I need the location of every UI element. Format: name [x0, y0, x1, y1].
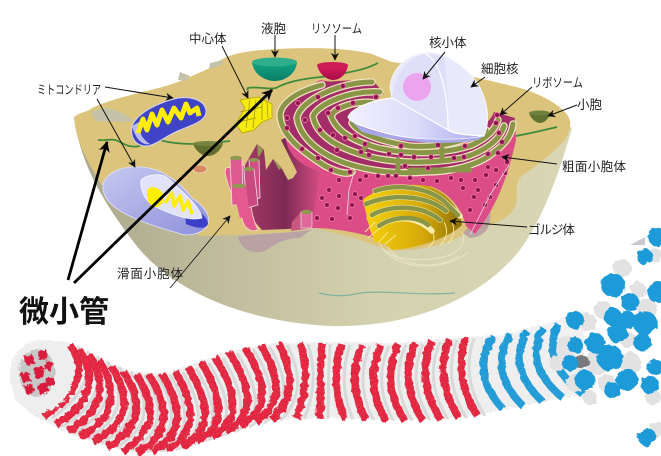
nucleolus: [403, 73, 431, 101]
vesicle right: [529, 110, 550, 123]
label: rough ER: 粗面小胞体: [562, 160, 626, 174]
callout arrows: [97, 35, 577, 288]
faint lower structures: [380, 232, 468, 266]
thick arrows to microtubules: [68, 90, 272, 283]
label: vacuole: 液胞: [261, 22, 287, 36]
centrosome: [236, 97, 272, 133]
arrow: nucleolus: [423, 52, 445, 79]
label: ribosome: リボソーム: [532, 76, 583, 90]
green membrane lines: [98, 63, 557, 149]
rough endoplasmic reticulum: [280, 79, 516, 238]
arrow: smooth ER: [170, 216, 230, 288]
label: centrosome: 中心体: [189, 31, 227, 46]
arrow: vacuole: [274, 35, 276, 57]
arrow: centrosome: [222, 46, 248, 98]
label: vesicle: 小胞: [577, 98, 603, 112]
arrow: rough ER: [502, 157, 557, 164]
microtubule: [0, 228, 661, 456]
label: nucleus: 細胞核: [481, 62, 519, 76]
arrow: ribosome: [500, 87, 532, 115]
golgi body: [363, 185, 462, 250]
label: nucleolus: 核小体: [429, 36, 467, 50]
cell lower body: [74, 118, 572, 326]
cell top surface: [74, 48, 570, 250]
labels: [19, 22, 626, 329]
red stripes: [44, 337, 477, 453]
mitochondrion upper: [132, 98, 206, 146]
grey fragment: [630, 237, 645, 245]
arrow: nucleus: [471, 77, 485, 87]
arrow: mitochondria upper: [105, 87, 173, 98]
open tube end: [10, 340, 72, 412]
vacuole: [252, 58, 297, 81]
blue stripes: [484, 324, 583, 409]
cell illustration: [74, 48, 572, 326]
arrow: lysosome: [334, 35, 336, 60]
vesicle centre: [193, 141, 223, 156]
label: golgi: ゴルジ体: [528, 222, 575, 237]
arrow: golgi: [450, 221, 527, 227]
grey stripe shadows: [52, 338, 485, 454]
smooth endoplasmic reticulum: [225, 130, 322, 231]
nucleus: [348, 53, 488, 143]
arrow: mitochondria lower: [97, 99, 135, 167]
membrane notches: [91, 60, 223, 122]
dissociating blue and white tubulin: [549, 228, 661, 446]
mitochondrion lower: [103, 167, 209, 235]
label: lysosome: リソソーム: [311, 22, 362, 36]
label: microtubule: 微小管: [19, 296, 109, 329]
faint pink projection: [238, 229, 312, 252]
label: smooth ER: 滑面小胞体: [117, 266, 183, 281]
grain texture: [0, 335, 590, 456]
label: mitochondria: ミトコンドリア: [37, 83, 101, 97]
lysosome: [317, 62, 348, 80]
cortical filament: [319, 292, 455, 296]
small orange vesicle: [193, 165, 207, 173]
arrow: vesicle: [548, 105, 577, 116]
tube body: [10, 310, 585, 452]
